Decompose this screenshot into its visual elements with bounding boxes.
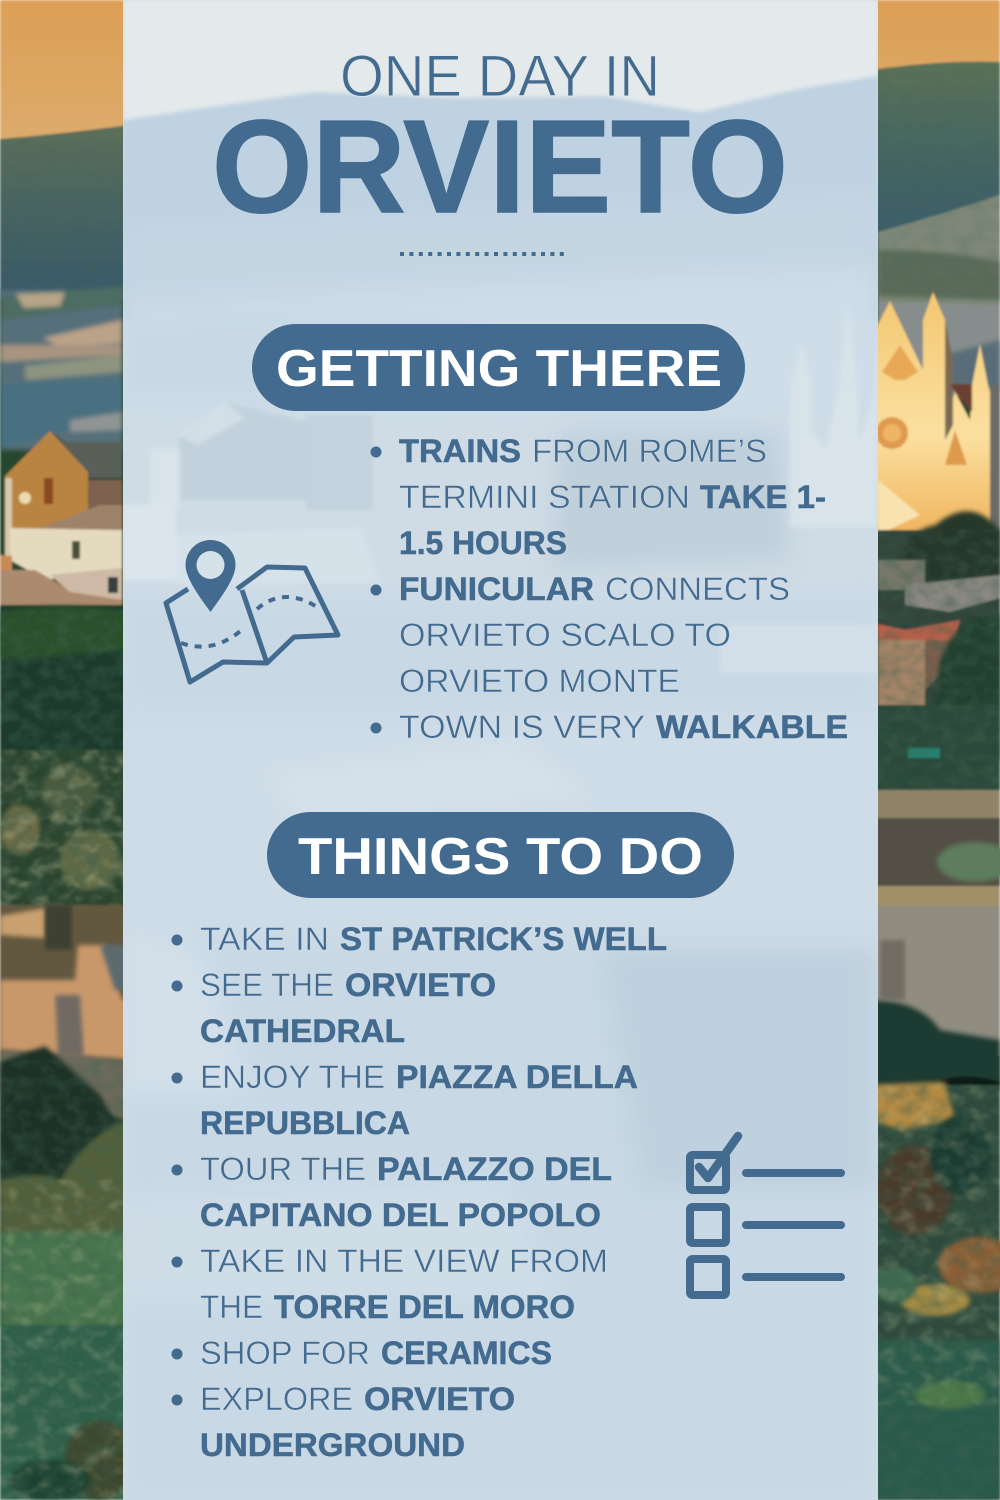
title: ORVIETO <box>212 93 788 240</box>
right lower foliage <box>870 1082 1000 1500</box>
list: things to do: TOUR THE <box>200 1151 366 1187</box>
icon: map with location pin <box>166 540 338 682</box>
list: things to do: UNDERGROUND <box>200 1427 465 1463</box>
church on the left <box>0 430 122 615</box>
list: getting there: FUNICULAR <box>399 571 594 607</box>
list: things to do: PIAZZA DELLA <box>396 1059 638 1095</box>
distant hills <box>0 62 1000 400</box>
faded hills and valley <box>132 262 874 1193</box>
left orange cliff <box>0 905 130 1120</box>
list: things to do: CERAMICS <box>381 1335 552 1371</box>
heading: getting there <box>252 324 745 411</box>
title: ONE DAY IN <box>340 44 660 109</box>
cathedral on the right <box>870 292 1000 535</box>
list: things to do: ORVIETO <box>364 1381 515 1417</box>
translucent central panel <box>123 0 878 1500</box>
left lower foliage <box>0 1046 135 1500</box>
list: things to do: THE <box>200 1289 263 1325</box>
foliage texture: lower <box>0 1060 1000 1500</box>
list: getting there: TRAINS <box>399 433 521 469</box>
dotted divider under title <box>400 252 565 256</box>
list: getting there: WALKABLE <box>656 709 848 745</box>
foliage texture: upper <box>0 70 1000 905</box>
list: getting there: 1.5 HOURS <box>399 525 567 561</box>
right cliff bands <box>870 790 1000 1093</box>
list: things to do: REPUBBLICA <box>200 1105 410 1141</box>
list: things to do: ENJOY THE <box>200 1059 385 1095</box>
faded scene inside panel <box>123 0 878 230</box>
list: things to do: SEE THE <box>200 967 334 1003</box>
heading: things to do: THINGS TO DO <box>298 828 703 886</box>
list: getting there: TOWN IS VERY <box>399 709 645 745</box>
list: getting there: TERMINI STATION <box>399 479 690 515</box>
list: things to do: SHOP FOR <box>200 1335 370 1371</box>
heading: things to do <box>267 812 734 898</box>
icon: checklist <box>690 1136 841 1295</box>
right trees and houses <box>870 511 1000 790</box>
heading: getting there: GETTING THERE <box>276 340 722 398</box>
left fields <box>0 286 123 450</box>
list: things to do: TAKE IN THE VIEW FROM <box>200 1243 608 1279</box>
list: getting there: FROM ROME’S <box>532 433 767 469</box>
list: getting there <box>370 433 848 745</box>
list: getting there: ORVIETO MONTE <box>399 663 680 699</box>
list: getting there: TAKE 1- <box>700 479 826 515</box>
list: things to do: ORVIETO <box>345 967 496 1003</box>
list: things to do <box>172 921 667 1463</box>
list: things to do: ST PATRICK’S WELL <box>340 921 667 957</box>
list: things to do: PALAZZO DEL <box>377 1151 612 1187</box>
faded ghost buildings <box>123 303 878 673</box>
list: things to do: EXPLORE <box>200 1381 353 1417</box>
list: things to do: CAPITANO DEL POPOLO <box>200 1197 601 1233</box>
list: things to do: TORRE DEL MORO <box>274 1289 575 1325</box>
list: things to do: CATHEDRAL <box>200 1013 405 1049</box>
sky <box>0 0 1000 145</box>
left tree band <box>0 605 130 908</box>
list: things to do: TAKE IN <box>200 921 329 957</box>
list: getting there: CONNECTS <box>605 571 790 607</box>
list: getting there: ORVIETO SCALO TO <box>399 617 731 653</box>
